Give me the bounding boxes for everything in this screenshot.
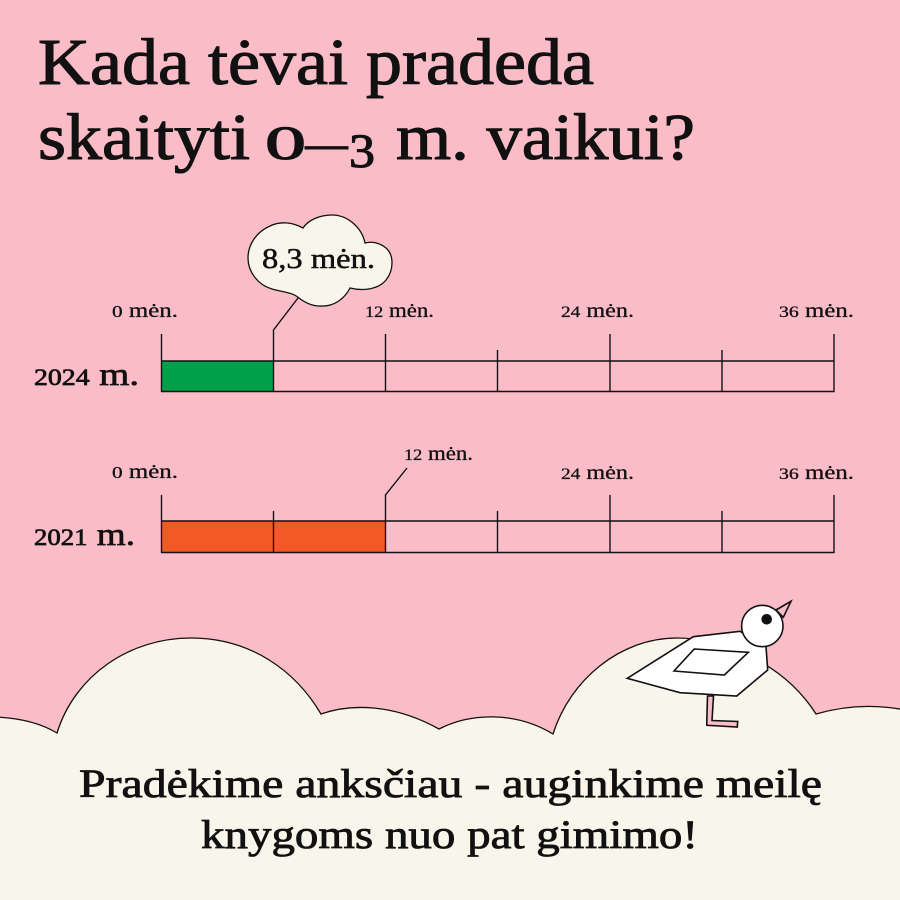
axis labels 2024 bbox=[112, 300, 854, 322]
row label 2021: 2021 m. bbox=[34, 516, 135, 552]
title: Kada tėvai pradeda bbox=[38, 26, 594, 99]
closing message bbox=[79, 761, 822, 857]
title: 3 bbox=[349, 125, 375, 178]
title: skaityti bbox=[38, 101, 250, 174]
axis labels 2024: 0 mėn. bbox=[112, 300, 178, 322]
bird eye bbox=[762, 615, 771, 624]
title: 0– bbox=[265, 117, 349, 170]
axis labels 2021: 24 mėn. bbox=[561, 462, 634, 484]
axis labels 2024: 36 mėn. bbox=[779, 300, 854, 322]
axis labels 2021: 12 mėn. bbox=[404, 443, 473, 465]
bird leg bbox=[707, 696, 738, 727]
chart: 2024 timeline bbox=[34, 215, 854, 392]
title bbox=[38, 26, 695, 178]
axis labels 2024: 12 mėn. bbox=[365, 300, 434, 322]
orange bar: 12 months bbox=[161, 521, 386, 552]
bird beak bbox=[776, 601, 791, 617]
bird head bbox=[742, 605, 783, 647]
title: m. vaikui? bbox=[396, 101, 695, 174]
callout: 8.3 months cloud bbox=[248, 215, 392, 306]
chart: 2021 timeline bbox=[34, 443, 854, 553]
bird wing bbox=[674, 649, 748, 675]
axis labels 2021: 0 mėn. bbox=[112, 461, 178, 483]
closing message: knygoms nuo pat gimimo! bbox=[201, 812, 698, 857]
green bar: 8.3 months bbox=[161, 361, 274, 392]
row label 2024: 2024 m. bbox=[34, 356, 139, 392]
bird body bbox=[627, 631, 768, 696]
icon: bird bbox=[627, 601, 791, 727]
callout: 8.3 months cloud: 8,3 mėn. bbox=[262, 243, 375, 275]
cream cloud ground bbox=[0, 638, 900, 900]
axis labels 2021 bbox=[112, 443, 854, 484]
closing message: Pradėkime anksčiau - auginkime meilę bbox=[79, 761, 822, 806]
axis labels 2021: 36 mėn. bbox=[779, 462, 854, 484]
axis labels 2024: 24 mėn. bbox=[561, 300, 634, 322]
